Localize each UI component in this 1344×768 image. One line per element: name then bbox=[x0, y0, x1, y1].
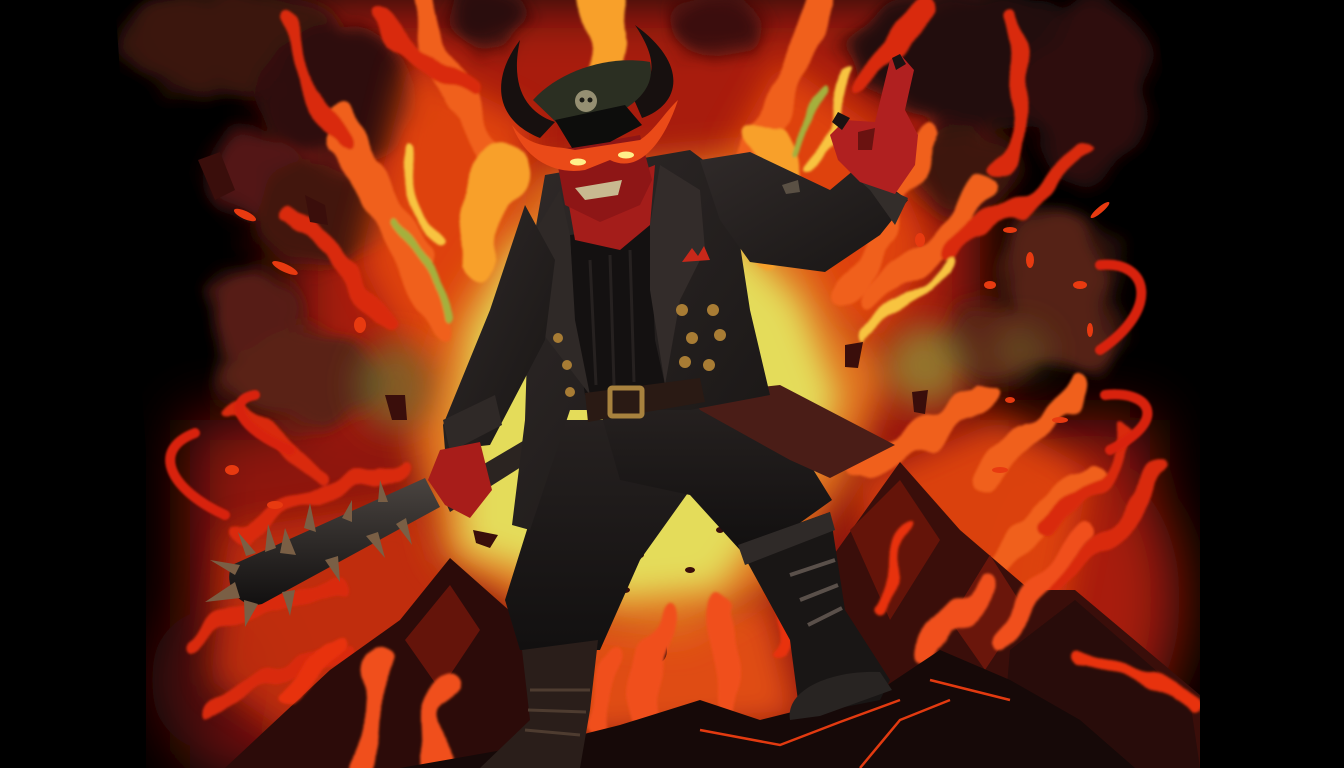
raised hand bbox=[830, 54, 918, 194]
belt bbox=[585, 378, 705, 422]
coat tail right bbox=[690, 385, 895, 478]
eyes bbox=[570, 158, 586, 166]
gripping hand bbox=[428, 442, 492, 518]
group: demon figure bbox=[205, 25, 918, 768]
dark smoke clouds bbox=[115, 0, 1150, 425]
flame streaks bbox=[190, 0, 1160, 720]
lapels bbox=[530, 190, 590, 395]
mace spikes bbox=[205, 480, 412, 627]
pocket square bbox=[682, 246, 710, 262]
belt buckle bbox=[610, 388, 642, 416]
flying embers and rocks bbox=[225, 200, 1111, 509]
horns bbox=[501, 25, 673, 138]
mace head bbox=[229, 478, 440, 605]
red smoke swirls bbox=[170, 265, 1147, 515]
buttons bbox=[553, 304, 726, 397]
sweater bbox=[570, 225, 665, 395]
coat bbox=[512, 150, 895, 530]
front leg and boot bbox=[600, 400, 892, 720]
back leg and boot bbox=[480, 420, 700, 768]
officer cap bbox=[533, 60, 651, 148]
teeth bbox=[575, 180, 622, 200]
torso bbox=[512, 150, 770, 530]
yellow-green central glow bbox=[410, 150, 890, 640]
neck bbox=[568, 165, 655, 250]
skull badge bbox=[575, 90, 597, 112]
mace bbox=[205, 438, 540, 627]
arm raised bbox=[700, 152, 908, 272]
arm down bbox=[443, 205, 555, 452]
dark rock foreground bbox=[400, 650, 1135, 768]
lava flames over mountains bbox=[290, 530, 1190, 768]
volcanic mountains bbox=[225, 462, 1200, 768]
burning brow bbox=[512, 100, 678, 171]
mace handle bbox=[440, 438, 540, 512]
orange glow behind flames bbox=[210, 60, 1090, 740]
dark red base of the fire bbox=[150, 0, 1180, 768]
demon face bbox=[512, 100, 678, 222]
